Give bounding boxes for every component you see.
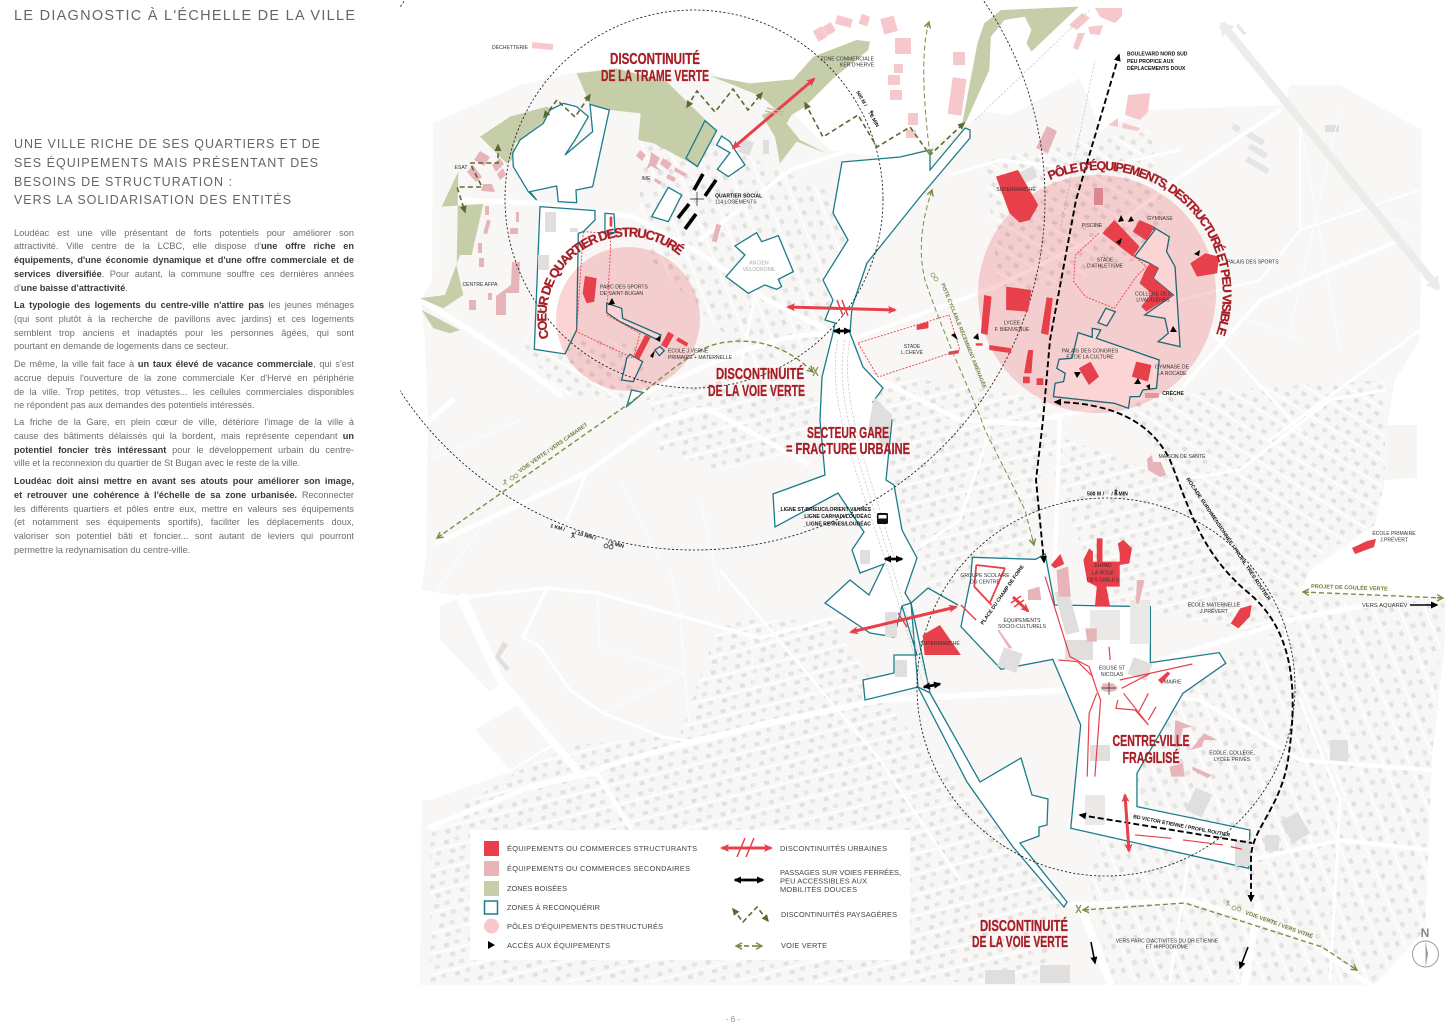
green route arrows: [437, 22, 1443, 970]
paragraph: commerce: ne répondent pas aux demandes des potentiels intéressés.: [14, 400, 255, 410]
map labels: ANCIEN: [749, 260, 769, 266]
map labels: BOULEVARD NORD SUD: [1127, 52, 1188, 58]
heading: secteur gare: = FRACTURE URBAINE: [786, 441, 910, 458]
paragraph: logements: La typologie des logements du centre-ville n'attire pas les jeunes ménages: [14, 300, 354, 310]
curved heading: pôle d'équipements: PÔLE D'ÉQUIPEMENTS, DESTRUCTURÉ ET PEU VISIBLE: [1047, 158, 1232, 336]
paragraph: gare: cause des bâtiments délaissés qui la bordent, mais représente cependant un: [14, 431, 354, 441]
map labels: QUARTIER SOCIAL: [715, 194, 762, 200]
map labels: LIVAUDIÈRES: [1136, 296, 1170, 304]
map labels: 1 KM / / 10 MIN / / 5 MIN: [549, 523, 625, 550]
map labels: LYCÉE: [1004, 320, 1021, 326]
heading: centre-ville fragilisé: CENTRE-VILLE: [1112, 733, 1190, 750]
legend: urban discontinuities: DISCONTINUITÉS URBAINES: [780, 844, 887, 853]
passages over railway: [834, 331, 940, 687]
heading: discontinuité de la voie verte north: DE LA VOIE VERTE: [708, 383, 805, 400]
icon: bus: [877, 513, 888, 524]
map labels: 500 M / / 5 MIN: [1087, 492, 1128, 498]
page title: LE DIAGNOSTIC À L'ÉCHELLE DE LA VILLE: [14, 7, 355, 24]
map labels: _LIGNE CARHAIX/LOUDÉAC: [800, 512, 871, 520]
secondary facilities: [532, 8, 1150, 138]
map labels: ÉCOLE PRIMAIRE: [1372, 530, 1416, 537]
legend: secondary facilities: ÉQUIPEMENTS OU COMMERCES SECONDAIRES: [507, 864, 690, 873]
paragraph: conclusion: permettre la redynamisation du centre-ville.: [14, 545, 190, 555]
map labels: SOCIO-CULTURELS: [998, 624, 1047, 630]
legend: access: ACCÈS AUX ÉQUIPEMENTS: [507, 941, 610, 950]
map labels: IME: [641, 176, 651, 182]
heading: discontinuité de la trame verte: [601, 51, 709, 85]
section heading: [14, 137, 320, 207]
legend: landscape discontinuities: [733, 907, 897, 922]
legend panel: [470, 830, 910, 960]
paragraph: commerce: accrue depuis l'ouverture de la zone commerciale Ker d'Hervé en périphérie: [14, 373, 354, 383]
page number: - 6 -: [726, 1015, 740, 1024]
legend: structuring facilities: ÉQUIPEMENTS OU COMMERCES STRUCTURANTS: [507, 844, 697, 853]
map labels: ÉCOLE MATERNELLE: [1188, 602, 1241, 608]
field parcels: [430, 110, 1420, 730]
paragraph: attractivité: équipements, d'une économie dynamique et d'une offre commerciale et de: [14, 255, 354, 265]
section heading: VERS LA SOLIDARISATION DES ENTITÉS: [14, 192, 291, 207]
paragraph: commerce: [14, 359, 354, 410]
paragraph: conclusion: [14, 476, 354, 555]
map labels: GYMNASE DE: [1155, 364, 1190, 370]
heading: centre-ville fragilisé: [1112, 733, 1190, 767]
paragraph: attractivité: [14, 228, 354, 292]
access triangles: [608, 215, 1200, 390]
grey buildings in zones: [538, 138, 1251, 866]
section heading: SES ÉQUIPEMENTS MAIS PRÉSENTANT DES: [14, 155, 318, 170]
legend: rail passages: PASSAGES SUR VOIES FERRÉES,: [780, 868, 901, 877]
circle: 500 m city centre: [917, 498, 1295, 876]
map labels: KER D'HERVÉ: [840, 62, 875, 68]
map labels: _LIGNE RENNES/LOUDÉAC: [802, 520, 871, 528]
map labels: F. BIENVENUE: [995, 327, 1030, 333]
paragraph: conclusion: Loudéac doit ainsi mettre en avant ses atouts pour améliorer son image,: [14, 476, 354, 486]
paragraph: logements: (qui sont plutôt à la recherche de pavillons avec jardins) et ces logements: [14, 314, 354, 324]
paragraph: attractivité: d'une baisse d'attractivité.: [14, 282, 128, 292]
map labels: VOIE VERTE / VERS CAMARET: [518, 422, 590, 475]
legend: destructured hubs: [484, 918, 663, 934]
map labels: PALAIS DES SPORTS: [1227, 260, 1279, 266]
paragraph: attractivité: services diversifiée. Pour autant, la commune souffre ces dernières années: [14, 269, 354, 279]
legend: rail passages: PEU ACCESSIBLES AUX: [780, 876, 867, 886]
map labels: J.PRÉVERT: [1380, 536, 1408, 544]
wooded zones: [420, 7, 1079, 333]
zone: east station edge: [911, 588, 958, 693]
legend: destructured hubs: PÔLES D'ÉQUIPEMENTS DESTRUCTURÉS: [507, 922, 663, 931]
map labels: PLACE DU CHAMP DE FOIRE: [980, 564, 1026, 626]
zone: southern rail strip: [918, 687, 1067, 907]
map labels: ROCADE SURDIMENSIONNÉE / PROFIL TRÈS ROUTIER: [1184, 476, 1273, 602]
landscape discontinuity arrows: [457, 89, 964, 212]
map labels: D'ATHLETISME: [1087, 264, 1124, 270]
map labels: [455, 44, 1416, 950]
legend: green route: [736, 941, 827, 950]
legend: structuring facilities: [484, 841, 697, 856]
map labels: PROJET DE COULÉE VERTE: [1311, 582, 1388, 593]
map labels: ET HIPPODROME: [1146, 944, 1189, 950]
map labels: SUPERMARCHÉ: [996, 186, 1036, 193]
legend: wooded zones: ZONES BOISÉES: [507, 884, 567, 893]
paragraph: logements: pourtant en demande de logements dans ce secteur.: [14, 341, 229, 351]
map labels: SUPERMARCHÉ: [920, 640, 960, 647]
legend: secondary facilities: [484, 861, 690, 876]
paragraph: conclusion: et retrouver une cohérence à l'échelle de sa zone urbanisée. Reconnecter: [14, 490, 354, 500]
map labels: GYMNASE: [1147, 216, 1173, 222]
black dashed roads: [1036, 55, 1293, 901]
map labels: NICOLAS: [1101, 672, 1124, 678]
zones: east cluster: [1053, 225, 1180, 408]
paragraph: logements: [14, 300, 354, 351]
map labels: PRIMAIRE + MATERNELLE: [668, 355, 733, 361]
legend: rail passages: [735, 868, 901, 894]
heading: secteur gare: [786, 425, 910, 458]
paragraph: attractivité: attractivité. Ville centre de la LCBC, elle dispose d'une offre riche en: [14, 241, 354, 251]
map labels: STADE: [1097, 258, 1114, 264]
section heading: BESOINS DE STRUCTURATION :: [14, 175, 232, 189]
paragraph: conclusion: valoriser son potentiel bâti et foncier... sont autant de leviers qui pourront: [14, 531, 354, 541]
heading: discontinuité de la voie verte south: [972, 918, 1068, 951]
legend: landscape discontinuities: DISCONTINUITÉS PAYSAGÈRES: [781, 910, 897, 919]
legend: zones to reclaim: ZONES À RECONQUÉRIR: [507, 903, 600, 912]
social housing bars: [678, 174, 716, 229]
legend: wooded zones: [484, 881, 567, 896]
black access arrows: [1091, 605, 1437, 968]
map labels: 114 LOGEMENTS: [715, 200, 757, 206]
icons: pedestrian and bicycle: [504, 110, 1241, 911]
red dotted site outlines: [577, 232, 1146, 377]
heading: discontinuité de la voie verte south: DISCONTINUITÉ: [980, 918, 1068, 935]
map labels: VERS AQUAREV: [1362, 603, 1408, 609]
map labels: ÉQUIPEMENTS: [1003, 617, 1041, 624]
map labels: _LIGNE ST-BRIEUC/LORIENT-VANNES: [777, 507, 872, 513]
heading: discontinuité de la trame verte: DE LA TRAME VERTE: [601, 68, 709, 85]
structuring facilities: [583, 170, 1376, 684]
map labels: DÉCHETTERIE: [492, 44, 529, 51]
map labels: ESAT: [455, 165, 467, 171]
road: N164: [1222, 23, 1438, 288]
map labels: LA ROCADE: [1157, 371, 1187, 377]
urban discontinuity arrows: [733, 79, 1129, 851]
road: N164: N164: [1234, 23, 1247, 37]
map labels: ZONE COMMERCIALE: [820, 56, 875, 62]
heading: discontinuité de la voie verte north: [708, 366, 805, 400]
paragraph: gare: La friche de la Gare, en plein cœur de ville, détériore l'image de la ville à: [14, 417, 354, 427]
map labels: PALAIS DES CONGRES: [1062, 348, 1119, 354]
paragraph: conclusion: (et notamment ses équipements sportifs), faciliter les déplacements doux,: [14, 517, 354, 527]
map labels: ÉCOLE J.VERNE: [668, 348, 709, 354]
zones: north-west cluster: [513, 103, 793, 407]
map labels: MAISON DE SANTÉ: [1159, 453, 1206, 460]
map labels: MAIRIE: [1164, 680, 1182, 686]
heading: secteur gare: SECTEUR GARE: [807, 425, 889, 442]
paragraph: gare: ville et la reconnexion du quartier de St Bugan avec le reste de la ville.: [14, 458, 300, 468]
map labels: PARC DES SPORTS: [600, 284, 649, 290]
map labels: PISTE CYCLABLE RÉCEMMENT AMÉNAGÉE: [939, 282, 989, 390]
paragraph: attractivité: Loudéac est une ville présentant de forts potentiels pour améliorer son: [14, 228, 354, 238]
map labels: J.PRÉVERT: [1200, 608, 1228, 615]
centre-ville street discontinuities: [974, 565, 1242, 849]
paragraph: commerce: de la ville. Trop petites, trop vétustes... les cellules commerciales disponibles: [14, 386, 354, 396]
map labels: ET DE LA CULTURE: [1066, 354, 1114, 360]
map labels: ÉCOLE, COLLÈGE,: [1209, 750, 1255, 756]
map labels: L.CHEVÉ: [901, 349, 923, 356]
heading: discontinuité de la voie verte south: DE LA VOIE VERTE: [972, 934, 1068, 951]
map labels: PEU PROPICE AUX: [1127, 59, 1174, 65]
map labels: ÉGLISE ST: [1099, 664, 1125, 672]
destructured hubs: [556, 175, 1216, 413]
legend: zones to reclaim: [484, 901, 600, 914]
paragraph: gare: potentiel foncier très intéressant pour le développement urbain du centre-: [14, 444, 354, 454]
dashed radius circles: [343, 0, 1295, 876]
base map: urban background: [420, 72, 1445, 985]
paragraph: commerce: De même, la ville fait face à un taux élevé de vacance commerciale, qui s'est: [14, 359, 354, 369]
zone: corridor and railway friche: [773, 128, 970, 637]
map labels: CENTRE AFPA: [462, 282, 498, 288]
north arrow: N: [1421, 926, 1429, 940]
map labels: DES SABLES: [1087, 578, 1119, 584]
legend: green route: VOIE VERTE: [781, 941, 827, 950]
road network: [421, 110, 1445, 985]
paragraph: logements: semblent trop anciens et inadaptés pour les personnes âgées, qui sont: [14, 328, 354, 338]
heading: centre-ville fragilisé: FRAGILISÉ: [1122, 750, 1180, 767]
paragraph: gare: [14, 417, 354, 468]
railway tracks: [835, 10, 1095, 690]
map labels: DÉPLACEMENTS DOUX: [1127, 64, 1186, 72]
map labels: PISCINE: [1082, 223, 1103, 229]
map labels: GROUPE SCOLAIRE: [960, 573, 1010, 579]
legend: rail passages: MOBILITÉS DOUCES: [780, 885, 857, 894]
map labels: LA ROSE: [1092, 570, 1114, 576]
zone: city centre: [961, 554, 1250, 868]
pink buildings in centre: [997, 567, 1217, 778]
map labels: VÉLODROME: [743, 266, 776, 273]
heading: discontinuité de la trame verte: DISCONTINUITÉ: [610, 51, 700, 68]
map labels: DU CENTRE: [970, 580, 1000, 586]
paragraph: conclusion: les différents quartiers et pôles entre eux, mettre en valeurs ses équipements: [14, 504, 354, 514]
section heading: UNE VILLE RICHE DE SES QUARTIERS ET DE: [14, 137, 320, 151]
legend: urban discontinuities: [722, 838, 887, 857]
map labels: DE SAINT-BUGAN: [600, 291, 643, 297]
circle: 1 km radius: [343, 0, 1045, 550]
map labels: STADE: [904, 344, 921, 350]
map labels: CRÈCHE: [1162, 389, 1184, 397]
map labels: BD VICTOR ETIENNE / PROFIL ROUTIER: [1133, 814, 1231, 839]
map labels: 500 M / / 5 MIN: [854, 90, 880, 129]
map labels: COLLÈGE DES: [1135, 290, 1172, 298]
zone: west station block: [863, 603, 918, 700]
map labels: VOIE VERTE / VERS VITRÉ: [1244, 908, 1314, 940]
map labels: VERS PARC D'ACTIVITÉS DU DR ETIENNE: [1116, 938, 1219, 944]
north arrow: [1412, 926, 1438, 967]
circle: 500 m north-west: [505, 10, 883, 388]
map labels: LYCÉE PRIVÉS: [1214, 756, 1251, 763]
zones to reclaim: [513, 103, 1250, 907]
map labels: EHPAD: [1094, 563, 1112, 569]
curved heading: cœur de quartier: COEUR DE QUARTIER DESTRUCTURÉ: [537, 228, 685, 339]
heading: discontinuité de la voie verte north: DISCONTINUITÉ: [716, 366, 804, 383]
